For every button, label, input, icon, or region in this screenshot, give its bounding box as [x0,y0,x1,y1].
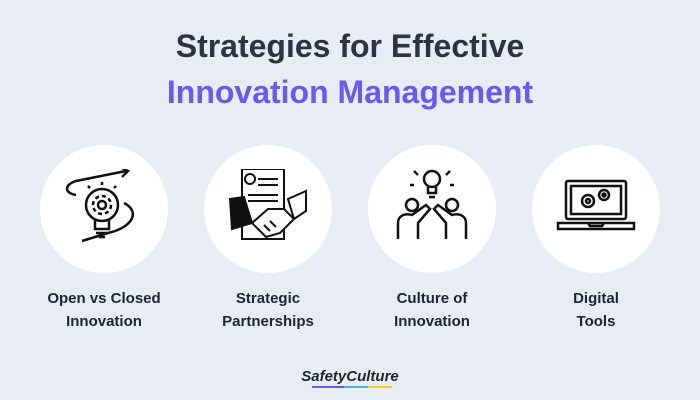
label 1: Innovation [66,313,142,330]
label 4: Digital [573,290,619,307]
label 2 [222,290,314,330]
label 2: Partnerships [222,313,314,330]
label 1 [47,290,161,330]
label 1: Open vs Closed [47,290,161,307]
icon: lightbulb gear [40,145,168,273]
label 3 [394,290,470,330]
logo: SafetyCulture [301,368,399,385]
title: Strategies for Effective [176,28,524,64]
icon: laptop gears [532,145,660,273]
icon: culture people [368,145,496,273]
label 4 [573,290,619,330]
icon: handshake [204,145,332,273]
subtitle: Innovation Management [167,74,533,110]
label 3: Innovation [394,313,470,330]
label 3: Culture of [397,290,467,307]
label 2: Strategic [236,290,300,307]
label 4: Tools [577,313,615,330]
